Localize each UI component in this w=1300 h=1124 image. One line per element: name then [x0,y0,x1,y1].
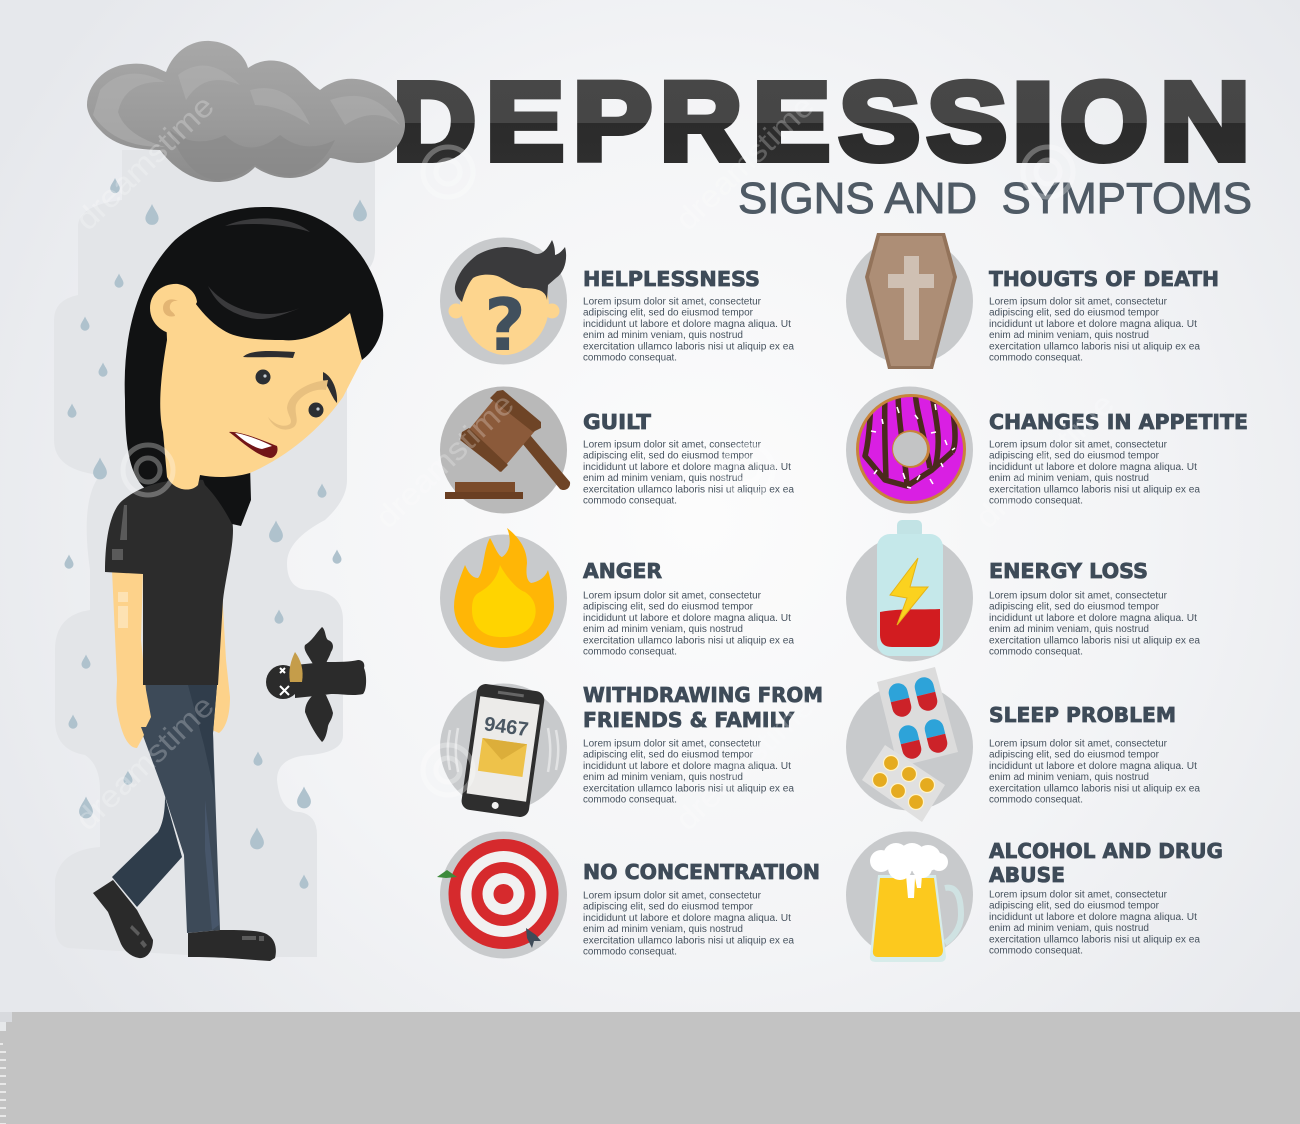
body text: commodo consequat. [583,352,677,364]
title: I [1011,60,1055,184]
stock watermarks: dreamstime [669,88,821,237]
body text: exercitation ullamco laboris nisi ut aliquip ex ea [583,484,795,495]
body text: exercitation ullamco laboris nisi ut aliquip ex ea [989,934,1201,945]
grey footer band [0,1012,1300,1124]
icon: gavel [440,386,570,514]
title: O [1060,60,1148,184]
heading: ABUSE [989,863,1065,887]
heading [583,683,823,732]
subtitle: SIGNS AND SYMPTOMS [738,174,1252,223]
item: sleep problem [846,667,1201,822]
hair shine [208,218,310,319]
heading: WITHDRAWING FROM [583,683,823,707]
stock watermarks: dreamstime [669,688,821,837]
body text: Lorem ipsum dolor sit amet, consectetur [583,590,762,602]
body text: enim ad minim veniam, quis nostrud [583,924,743,935]
item: changes in appetite [846,386,1248,514]
body text: enim ad minim veniam, quis nostrud [989,923,1149,934]
body text: Lorem ipsum dolor sit amet, consectetur [583,738,762,750]
icon: coffin [846,233,973,369]
body text [989,590,1201,658]
icon: phone: 9467 [483,713,530,741]
heading: GUILT [583,410,651,434]
body text: Lorem ipsum dolor sit amet, consectetur [989,590,1168,602]
item: withdrawing [440,683,823,818]
body text [583,440,795,506]
title: S [839,60,920,184]
stock watermarks: dreamstime [969,386,1121,535]
item: energy loss [846,520,1201,662]
nose [268,380,328,430]
body text: adipiscing elit, sed do eiusmod tempor [989,451,1160,462]
body text: adipiscing elit, sed do eiusmod tempor [989,602,1160,613]
heading: THOUGTS OF DEATH [989,267,1219,291]
title: E [486,60,564,184]
body text: adipiscing elit, sed do eiusmod tempor [989,308,1160,319]
icon: voodoo bird [266,627,366,742]
body text: enim ad minim veniam, quis nostrud [989,772,1149,783]
body text: commodo consequat. [583,646,677,658]
raindrops [64,178,367,889]
body text: enim ad minim veniam, quis nostrud [583,473,743,484]
body text: exercitation ullamco laboris nisi ut aliquip ex ea [583,935,795,946]
stock watermarks: dreamstime [69,688,221,837]
body text: Lorem ipsum dolor sit amet, consectetur [989,738,1168,750]
item: no concentration [437,832,820,958]
heading: ANGER [583,559,662,583]
body text: enim ad minim veniam, quis nostrud [583,330,743,341]
heading: ENERGY LOSS [989,559,1148,583]
body text: adipiscing elit, sed do eiusmod tempor [989,750,1160,761]
eyebrows [243,351,337,403]
title: P [573,60,652,184]
icon: flame [440,528,567,662]
body text: incididunt ut labore et dolore magna aliqua. Ut [989,462,1197,473]
body text: Lorem ipsum dolor sit amet, consectetur [989,440,1168,450]
title: D [393,60,476,184]
body text [989,890,1201,956]
ear [150,284,197,335]
body text: exercitation ullamco laboris nisi ut aliquip ex ea [583,635,795,646]
icon: target with darts [437,832,567,958]
eyes [256,370,324,418]
body text: enim ad minim veniam, quis nostrud [583,772,743,783]
front leg [138,685,220,933]
body text: exercitation ullamco laboris nisi ut aliquip ex ea [583,783,795,794]
icon: head with question mark [440,238,567,367]
hair below chin [200,465,251,526]
title: N [1160,60,1250,184]
body text: commodo consequat. [583,946,677,958]
body text: enim ad minim veniam, quis nostrud [989,473,1149,484]
body text [583,296,795,364]
mouth [229,432,278,458]
item: guilt [440,386,795,514]
item: thoughts of death [846,233,1219,369]
body text: commodo consequat. [989,646,1083,658]
body text: Lorem ipsum dolor sit amet, consectetur [989,890,1168,900]
body text: incididunt ut labore et dolore magna aliqua. Ut [583,761,791,772]
right arm [210,590,230,733]
body text: incididunt ut labore et dolore magna aliqua. Ut [989,912,1197,923]
body text: incididunt ut labore et dolore magna aliqua. Ut [989,761,1197,772]
body text: Lorem ipsum dolor sit amet, consectetur [583,296,762,308]
body text [583,738,795,806]
body text: commodo consequat. [989,946,1083,956]
body text: commodo consequat. [989,496,1083,506]
body text: Lorem ipsum dolor sit amet, consectetur [989,296,1168,308]
left arm [112,570,151,748]
character: depressed person [93,207,383,961]
body text: adipiscing elit, sed do eiusmod tempor [583,750,754,761]
body text: enim ad minim veniam, quis nostrud [583,624,743,635]
body text: incididunt ut labore et dolore magna aliqua. Ut [989,319,1197,330]
body text: adipiscing elit, sed do eiusmod tempor [583,451,754,462]
back hair [125,207,383,495]
body text: adipiscing elit, sed do eiusmod tempor [989,901,1160,912]
heading: HELPLESSNESS [583,267,760,291]
shoes [93,880,153,958]
icon: beer mug [846,832,973,962]
title: S [927,60,1007,184]
body text: commodo consequat. [989,352,1083,364]
heading: NO CONCENTRATION [583,860,820,884]
body text: enim ad minim veniam, quis nostrud [989,624,1149,635]
stock watermarks: dreamstime [369,386,521,535]
body text [583,890,795,958]
body text: enim ad minim veniam, quis nostrud [989,330,1149,341]
title: R [660,60,742,184]
body text: incididunt ut labore et dolore magna aliqua. Ut [583,462,791,473]
body text: adipiscing elit, sed do eiusmod tempor [583,902,754,913]
heading: CHANGES IN APPETITE [989,410,1248,434]
stock watermarks: dreamstime [69,88,221,237]
body text: incididunt ut labore et dolore magna aliqua. Ut [583,613,791,624]
back leg [112,797,182,907]
body text: incididunt ut labore et dolore magna aliqua. Ut [583,319,791,330]
body text: exercitation ullamco laboris nisi ut aliquip ex ea [989,635,1201,646]
item: alcohol and drug abuse [846,832,1223,962]
body text [989,440,1201,506]
body text [583,590,795,658]
title [393,60,1250,184]
body text: commodo consequat. [583,496,677,506]
body text [989,296,1201,364]
body text: commodo consequat. [583,794,677,806]
body text: adipiscing elit, sed do eiusmod tempor [583,308,754,319]
stock watermarks [69,88,1121,837]
body text: commodo consequat. [989,794,1083,806]
heading [989,839,1223,887]
icon: phone [440,683,567,818]
heading: FRIENDS & FAMILY [583,708,795,732]
body text: exercitation ullamco laboris nisi ut aliquip ex ea [989,341,1201,352]
body text: Lorem ipsum dolor sit amet, consectetur [583,440,762,450]
shirt [105,480,233,685]
body text: incididunt ut labore et dolore magna aliqua. Ut [989,613,1197,624]
icon: battery [846,520,973,662]
body text: exercitation ullamco laboris nisi ut aliquip ex ea [583,341,795,352]
item: helplessness [440,238,795,367]
item: anger [440,528,795,662]
body text [989,738,1201,806]
body text: exercitation ullamco laboris nisi ut aliquip ex ea [989,783,1201,794]
title: E [753,60,830,184]
icon: pills [846,667,973,822]
face and neck [160,290,362,490]
body text: incididunt ut labore et dolore magna aliqua. Ut [583,913,791,924]
storm cloud [87,41,405,182]
body text: adipiscing elit, sed do eiusmod tempor [583,602,754,613]
icon: donut [846,386,973,514]
icon: head with question mark: ? [484,283,526,367]
rain backdrop shape [54,150,375,957]
body text: Lorem ipsum dolor sit amet, consectetur [583,890,762,902]
heading: SLEEP PROBLEM [989,703,1176,727]
body text: exercitation ullamco laboris nisi ut aliquip ex ea [989,484,1201,495]
heading: ALCOHOL AND DRUG [989,839,1223,863]
